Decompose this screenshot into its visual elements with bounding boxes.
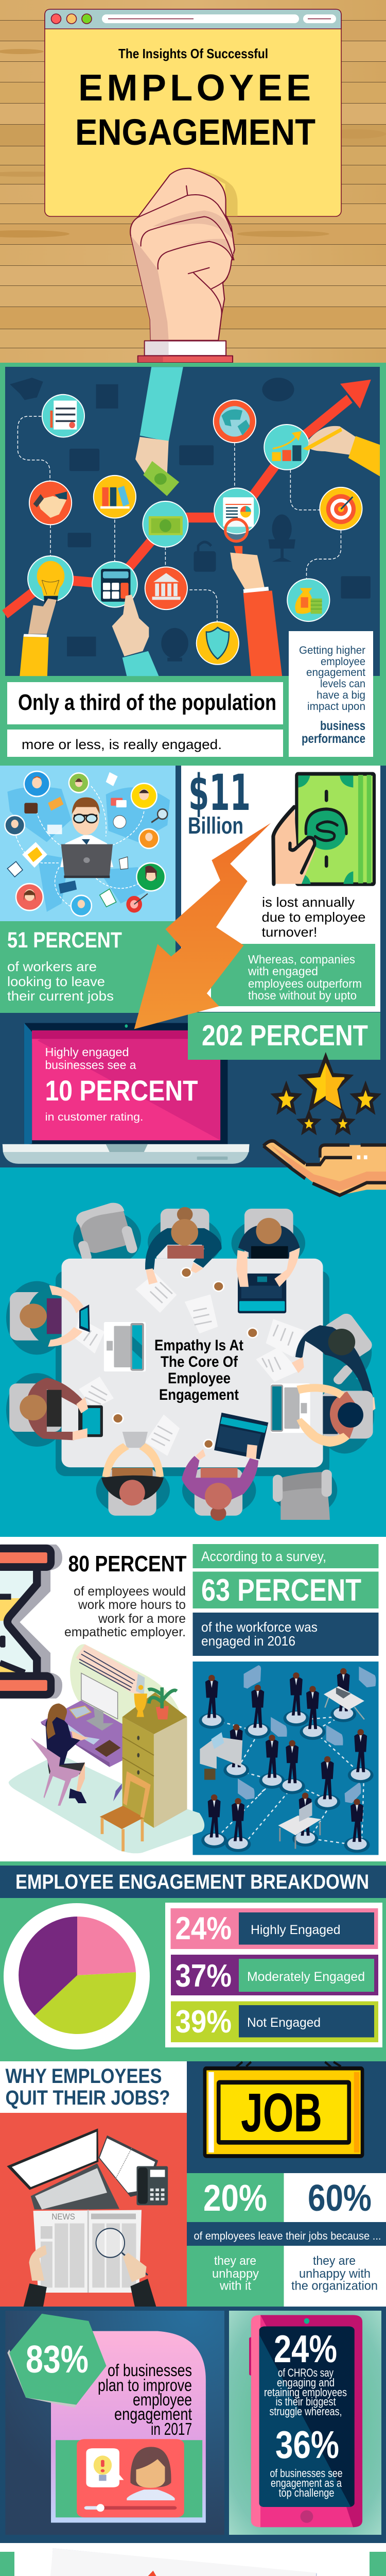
panel: whereas companies: employees outperform	[248, 977, 362, 990]
callout: business performance: performance	[302, 732, 365, 746]
caption strip: of employees leave their jobs because ...	[194, 2230, 381, 2242]
diary	[98, 2136, 158, 2197]
table shadow	[56, 1271, 329, 1476]
text: 80 percent: work for a more	[98, 1612, 186, 1626]
heading: empathy	[154, 1337, 243, 1403]
panel: laptop with 10 percent: Highly engaged	[45, 1045, 129, 1059]
person right upper	[292, 1311, 375, 1413]
plant	[148, 1687, 177, 1719]
arrow: orange lightning bolt	[134, 823, 271, 1029]
callout: business performance: have a big	[317, 689, 365, 701]
side stripes	[0, 2552, 386, 2576]
stat: 60 percent	[284, 2173, 386, 2222]
panel: smartphone stats: 24%	[274, 2327, 337, 2370]
heading: empathy: The Core Of	[161, 1353, 238, 1370]
panel: laptop with 10 percent: 10 PERCENT	[45, 1074, 198, 1107]
panel: 51 percent: their current jobs	[7, 988, 114, 1004]
heading: why employees quit: WHY EMPLOYEES	[5, 2065, 162, 2088]
chair shadows	[6, 1211, 374, 1516]
icon: shield	[206, 628, 229, 659]
icon: five stars on open hand	[264, 1052, 386, 1195]
panel: workforce engaged: of the workforce was	[201, 1619, 318, 1635]
icon: money bag	[295, 588, 322, 614]
icon: light bulb	[37, 561, 64, 609]
legend row: highly engaged: 24%	[175, 1911, 232, 1946]
panel: laptop with 10 percent: in customer rating.	[45, 1111, 143, 1123]
icon: bank	[152, 573, 181, 600]
panel: only a third box	[7, 682, 283, 724]
panel: only a third box: Only a third of the population	[18, 690, 276, 715]
panel: more or less box	[7, 730, 283, 757]
world map blobs	[7, 787, 170, 912]
legend row: highly engaged	[171, 1908, 378, 1949]
text: 80 percent	[64, 1551, 187, 1639]
icon circles	[28, 395, 362, 665]
panel: 51 percent	[0, 921, 176, 1013]
icon: target	[326, 494, 356, 524]
text: CHROs: struggle whereas,	[270, 2405, 342, 2418]
legend row: moderately engaged: 37%	[175, 1958, 232, 1994]
text: unhappy with organization: the organization	[291, 2279, 378, 2293]
wooden chair	[100, 1771, 151, 1851]
heading: empathy: Empathy Is At	[154, 1337, 243, 1354]
panel: 83 percent	[5, 2311, 224, 2535]
panel: 83 percent: 83%	[26, 2337, 89, 2381]
text: 80 percent: 80 PERCENT	[68, 1551, 187, 1577]
panel: remote workers illustration	[0, 766, 176, 921]
text: of businesses: engagement	[114, 2404, 192, 2424]
icon: calculator	[101, 569, 130, 602]
panel: job sign	[187, 2061, 386, 2173]
text: of businesses: in 2017	[151, 2419, 192, 2438]
icon: hourglass	[0, 1545, 62, 1699]
paper details	[75, 2571, 360, 2576]
papers	[74, 1273, 305, 1456]
arrow: rising trend line	[5, 380, 371, 614]
text: of businesses: of businesses	[108, 2361, 192, 2380]
stat: 60 percent: 60%	[308, 2178, 372, 2219]
laptop	[7, 2128, 119, 2209]
desk	[41, 1701, 123, 1801]
panel: whereas companies: those without by upto	[248, 989, 357, 1002]
background silhouettes	[10, 378, 371, 662]
panel: 51 percent: looking to leave	[7, 974, 105, 989]
panel: software tablet section	[0, 2543, 386, 2576]
hexagon badge	[7, 2314, 107, 2408]
heading: why employees quit	[0, 2061, 187, 2113]
panel: dark navy backing	[0, 766, 386, 1167]
billion amount	[188, 764, 251, 839]
legend row: not engaged: Not Engaged	[247, 2015, 321, 2030]
panel: breakdown banner	[0, 1861, 386, 1898]
legend row: not engaged	[171, 2001, 378, 2042]
title: EMPLOYEE	[78, 67, 311, 109]
arms and hands	[20, 367, 380, 676]
callout: business performance: employee	[321, 656, 365, 668]
dashed connectors	[17, 416, 341, 623]
stat: 20 percent	[187, 2173, 284, 2222]
monitor	[69, 1673, 118, 1731]
text: is lost annually: turnover!	[261, 924, 317, 940]
shirt cuff	[145, 341, 226, 355]
callout: business performance: impact upon	[307, 701, 365, 713]
heading: why employees quit: QUIT THEIR JOBS?	[5, 2087, 170, 2109]
pink chair	[31, 1738, 81, 1806]
notebook	[95, 1740, 120, 1757]
icon: bar chart	[272, 431, 302, 461]
desks	[200, 1686, 364, 1849]
avatars	[5, 771, 165, 916]
coffee cups	[112, 1267, 258, 1449]
speech bubbles	[238, 1665, 376, 1803]
text: is lost annually: due to employee	[261, 909, 365, 925]
caption strip	[187, 2222, 386, 2246]
text: CHROs: engaging and	[277, 2376, 335, 2389]
billion amount: Billion	[188, 812, 243, 839]
panel: laptop with 10 percent: businesses see a	[45, 1058, 136, 1072]
address bars	[102, 14, 336, 23]
telephone	[136, 2166, 168, 2205]
icon: newspaper	[223, 497, 254, 527]
person bottom left	[101, 1443, 164, 1516]
woman at desk	[45, 1703, 89, 1803]
panel: teal meeting background	[0, 1167, 386, 1537]
icon: banknote	[149, 516, 183, 535]
callout: business performance: business	[320, 719, 365, 733]
legend row: moderately engaged	[171, 1955, 378, 1995]
text: top challenge	[270, 2467, 343, 2499]
title: The Insights Of Successful	[118, 46, 268, 61]
callout: business performance: levels can	[320, 678, 365, 690]
person right lower	[296, 1384, 373, 1447]
panel: 202 percent	[188, 1012, 380, 1060]
pie chart	[4, 1903, 150, 2049]
callout: business performance	[289, 631, 373, 757]
panel: 51 percent: of workers are	[7, 959, 97, 974]
panel: desk with newspaper	[0, 2113, 187, 2307]
text: unhappy with organization: unhappy with	[299, 2267, 371, 2281]
panel: business people network	[192, 1662, 379, 1855]
panel: browser window	[45, 9, 341, 216]
legend row: moderately engaged: Moderately Engaged	[247, 1970, 365, 1984]
hands and sleeves	[23, 2245, 156, 2307]
text: 80 percent: empathetic employer.	[64, 1625, 186, 1639]
legend	[165, 1903, 382, 2047]
title: ENGAGEMENT	[75, 112, 315, 153]
icon: magnifier	[225, 519, 248, 564]
illustration: isometric office	[9, 1644, 204, 1853]
text: CHROs: retaining employees	[264, 2386, 347, 2399]
legend row: highly engaged: Highly Engaged	[251, 1923, 341, 1937]
panel: more or less box: more or less, is really engaged.	[22, 737, 222, 752]
tablets	[79, 1304, 90, 1332]
text: top challenge: of businesses see	[270, 2467, 343, 2480]
text: is lost annually	[261, 894, 365, 940]
text: top challenge: engagement as a	[271, 2477, 342, 2489]
callout: business performance: Getting higher	[299, 645, 365, 656]
person top right	[236, 1209, 300, 1287]
pink tab	[51, 2331, 206, 2522]
text: of businesses	[98, 2361, 192, 2438]
icon: document	[50, 401, 77, 430]
panel: navy section	[0, 2307, 386, 2543]
panel: job sign: JOB	[241, 2082, 322, 2143]
text: unhappy with organization	[284, 2246, 386, 2307]
icon: binders	[100, 486, 130, 509]
business figures	[199, 1668, 374, 1853]
title	[75, 46, 315, 153]
heading: empathy: Employee	[168, 1370, 231, 1387]
newspaper	[33, 2210, 142, 2293]
legend row: not engaged: 39%	[175, 2004, 232, 2040]
laptops	[104, 1322, 146, 1371]
magnifying glass	[96, 2228, 148, 2275]
panel: workforce engaged: engaged in 2016	[201, 1633, 295, 1649]
callout: business performance: engagement	[306, 667, 365, 679]
text: unhappy with it	[187, 2246, 284, 2307]
air conditioner	[76, 1645, 145, 1695]
text: is lost annually: is lost annually	[262, 894, 355, 910]
person bottom right	[182, 1445, 258, 1521]
icon: raised fist	[130, 168, 238, 363]
stat: 20 percent: 20%	[203, 2178, 267, 2219]
panel: 11 billion white	[181, 766, 380, 1012]
text: of businesses: plan to improve	[98, 2376, 192, 2395]
panel: meeting table	[6, 1203, 375, 1521]
empty chair bottom	[273, 1470, 332, 1520]
panel: smartphone stats: 36%	[275, 2423, 339, 2466]
text: 80 percent: work more hours to	[78, 1598, 186, 1612]
floating props	[7, 772, 167, 912]
text: CHROs	[264, 2366, 347, 2418]
billion amount: $11	[188, 766, 251, 822]
text: CHROs: is their biggest	[276, 2395, 336, 2408]
text: 80 percent: of employees would	[74, 1584, 186, 1599]
panel: business network	[5, 367, 380, 676]
main character with laptop	[60, 798, 113, 878]
text: unhappy with it: unhappy	[212, 2267, 259, 2281]
panel: workforce engaged	[192, 1613, 379, 1656]
text: unhappy with organization: they are	[313, 2254, 356, 2268]
panel: green frame	[0, 363, 386, 766]
panel: whereas companies: with engaged	[248, 964, 318, 978]
panel: breakdown	[0, 1898, 386, 2061]
cabinet	[122, 1692, 187, 1828]
panel: wood background	[0, 0, 386, 367]
panel: laptop with 10 percent	[3, 1023, 250, 1164]
heading: empathy: Engagement	[159, 1386, 239, 1403]
text: unhappy with it: with it	[219, 2279, 251, 2293]
text: top challenge: top challenge	[279, 2486, 335, 2499]
person top centre	[145, 1207, 222, 1284]
panel: 80 percent white	[0, 1537, 386, 1861]
panel: 51 percent: 51 PERCENT	[7, 928, 122, 953]
panel: whereas companies: Whereas, companies	[248, 953, 355, 966]
text: unhappy with it: they are	[214, 2254, 256, 2268]
newspaper: NEWS	[51, 2212, 75, 2222]
icon: globe	[219, 406, 250, 436]
trophy	[134, 1685, 147, 1717]
panel: whereas companies	[211, 944, 375, 1006]
video card	[77, 2439, 184, 2517]
window control dots	[51, 14, 92, 24]
text: CHROs: of CHROs say	[278, 2366, 334, 2379]
person left upper	[10, 1285, 84, 1347]
panel: according to a survey: According to a survey,	[201, 1549, 326, 1564]
empty chair top	[76, 1203, 138, 1262]
panel: smartphone stats	[229, 2311, 381, 2535]
icon: hand holding banknote	[273, 774, 374, 884]
sleeve	[138, 356, 233, 363]
text: of businesses: employee	[133, 2390, 192, 2409]
person left lower	[9, 1378, 88, 1440]
icon: handshake	[33, 492, 67, 518]
panel: according to a survey	[192, 1544, 379, 1568]
browser title bar	[45, 9, 341, 29]
